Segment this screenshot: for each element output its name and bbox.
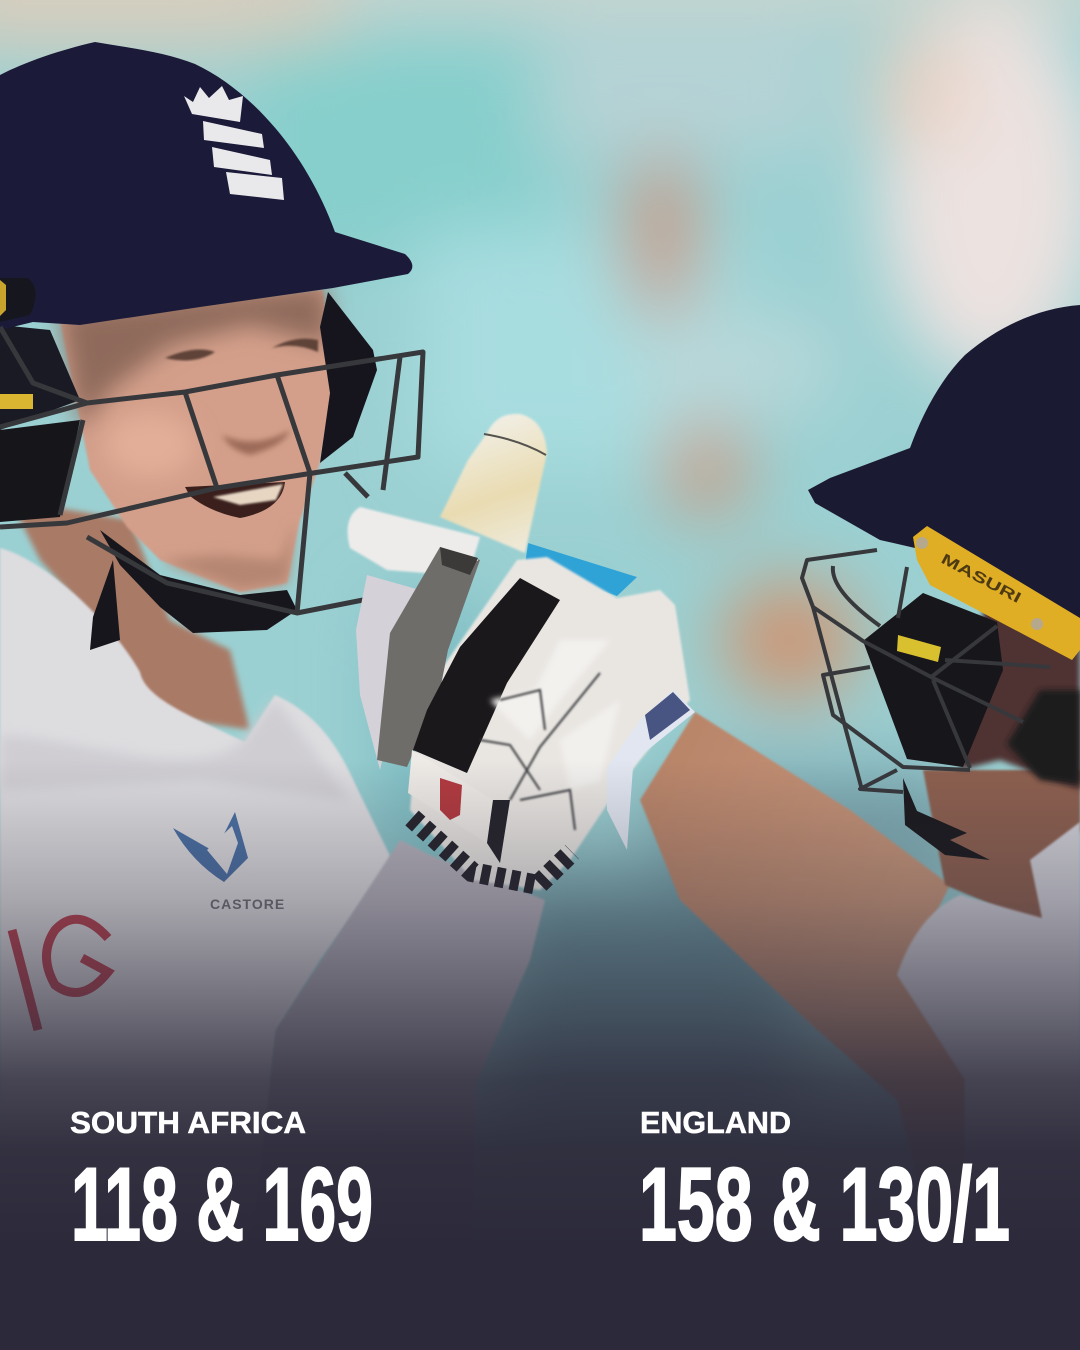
score: England: [639, 1105, 1010, 1263]
helmet side knob: [0, 278, 36, 322]
team name: SOUTH AFRICA: [70, 1105, 306, 1140]
face in shadow: [960, 600, 1080, 790]
sponsor mark: [12, 919, 108, 1030]
forearm: [640, 712, 965, 1350]
shirt: [897, 822, 1080, 1350]
left fingers: [356, 575, 420, 770]
glove seams: [480, 673, 600, 830]
team name: ENGLAND: [640, 1105, 791, 1140]
forehead shadow: [60, 285, 330, 430]
band screws: [916, 537, 928, 549]
sleeve: [240, 840, 545, 1350]
band brand: MASURI: [938, 551, 1024, 607]
glove pad shading: [490, 640, 610, 740]
helmet side flaps: [0, 420, 80, 522]
glove label with red badge: [408, 750, 493, 843]
bat grip: [377, 547, 480, 767]
nose shadow: [222, 430, 290, 455]
helmet crest: [184, 86, 284, 200]
beard: [1007, 690, 1080, 785]
visor yellow tag: [897, 635, 941, 662]
score: South Africa: [70, 1105, 373, 1263]
left player: [0, 42, 545, 1350]
shirt maker name: CASTORE: [210, 896, 285, 912]
shirt: [0, 548, 392, 1350]
chin strap: [90, 560, 120, 650]
cheek highlight: [105, 413, 195, 477]
shirt maker logo: [173, 812, 248, 882]
wrist cuff: [607, 690, 695, 850]
bottom dark gradient: [0, 760, 1080, 1350]
glove body: [410, 557, 690, 890]
right grille: [802, 550, 1050, 792]
blue bat grip: [525, 543, 637, 596]
dark visor inset: [863, 593, 1003, 767]
face: [60, 290, 333, 592]
helmet yellow clip: [0, 394, 33, 409]
visor grille: [0, 327, 423, 613]
eye shadows: [165, 350, 215, 360]
helmet dome: [808, 305, 1080, 640]
neck: [10, 500, 250, 730]
mouth: [185, 482, 285, 518]
yellow band: [913, 526, 1080, 660]
chin shadow: [160, 520, 296, 590]
shirt shading: [0, 700, 350, 800]
black finger panel: [413, 578, 560, 773]
score value: 118 & 169: [71, 1147, 373, 1263]
gloves and bat handle: [348, 414, 695, 890]
straps: [903, 778, 990, 860]
finger tape: [348, 507, 480, 573]
helmet dome: [0, 42, 412, 330]
neck and jaw: [923, 770, 1080, 925]
right player: [640, 305, 1080, 1350]
thumb tape: [440, 414, 547, 553]
checkered cuff: [412, 818, 572, 885]
